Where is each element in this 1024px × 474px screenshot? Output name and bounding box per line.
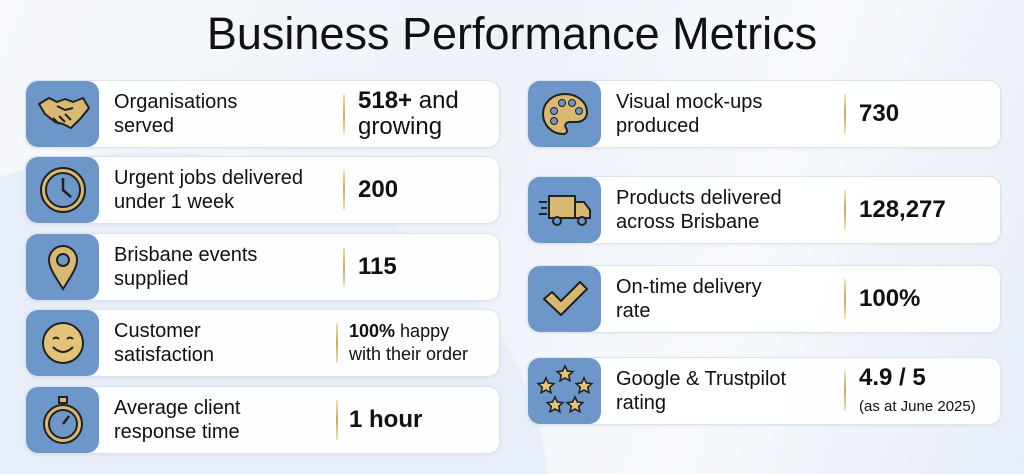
card: urgent jobs: [25, 156, 500, 224]
card: products delivered: Products delivered: [616, 187, 782, 209]
card: satisfaction: 100% happy: [349, 321, 449, 341]
card: organisations served: Organisations: [114, 91, 237, 113]
icon: stopwatch: [26, 387, 99, 453]
card: on-time: [527, 265, 1001, 333]
card: organisations served: served: [114, 115, 174, 137]
card: mock-ups: 730: [859, 100, 899, 127]
card: products delivered: 128,277: [859, 196, 946, 223]
card: response time: Average client: [114, 397, 240, 419]
card: rating: [527, 357, 1001, 425]
icon: truck: [528, 177, 601, 243]
card: satisfaction: Customer: [114, 320, 201, 342]
card: rating: (as at June 2025): [859, 398, 976, 415]
card: urgent jobs: 200: [358, 176, 398, 203]
card: events: supplied: [114, 268, 189, 290]
card: organisations served: [25, 80, 500, 148]
icon: clock: [26, 157, 99, 223]
card: events: [25, 233, 500, 301]
card: organisations served: 518+ and: [358, 87, 459, 114]
card: rating: 4.9 / 5: [859, 364, 926, 391]
card: urgent jobs: under 1 week: [114, 191, 234, 213]
card: mock-ups: [527, 80, 1001, 148]
card: on-time: rate: [616, 300, 650, 322]
card: satisfaction: with their order: [349, 344, 468, 364]
card: response time: [25, 386, 500, 454]
card: products delivered: [527, 176, 1001, 244]
card: events: Brisbane events: [114, 244, 257, 266]
card: products delivered: across Brisbane: [616, 211, 759, 233]
icon: palette: [528, 81, 601, 147]
card: response time: 1 hour: [349, 406, 422, 433]
icon: check: [528, 266, 601, 332]
card: on-time: On-time delivery: [616, 276, 762, 298]
icon: smiley: [26, 310, 99, 376]
title: Business Performance Metrics: [207, 8, 817, 59]
icon: pin: [26, 234, 99, 300]
card: satisfaction: [25, 309, 500, 377]
card: satisfaction: satisfaction: [114, 344, 214, 366]
card: organisations served: growing: [358, 113, 442, 140]
icon: handshake: [26, 81, 99, 147]
card: events: 115: [358, 253, 397, 280]
card: on-time: 100%: [859, 285, 920, 312]
card: rating: Google & Trustpilot: [616, 368, 786, 390]
icon: stars: [528, 358, 601, 424]
card: urgent jobs: Urgent jobs delivered: [114, 167, 303, 189]
card: mock-ups: produced: [616, 115, 699, 137]
card: rating: rating: [616, 392, 666, 414]
card: mock-ups: Visual mock-ups: [616, 91, 762, 113]
card: response time: response time: [114, 421, 240, 443]
